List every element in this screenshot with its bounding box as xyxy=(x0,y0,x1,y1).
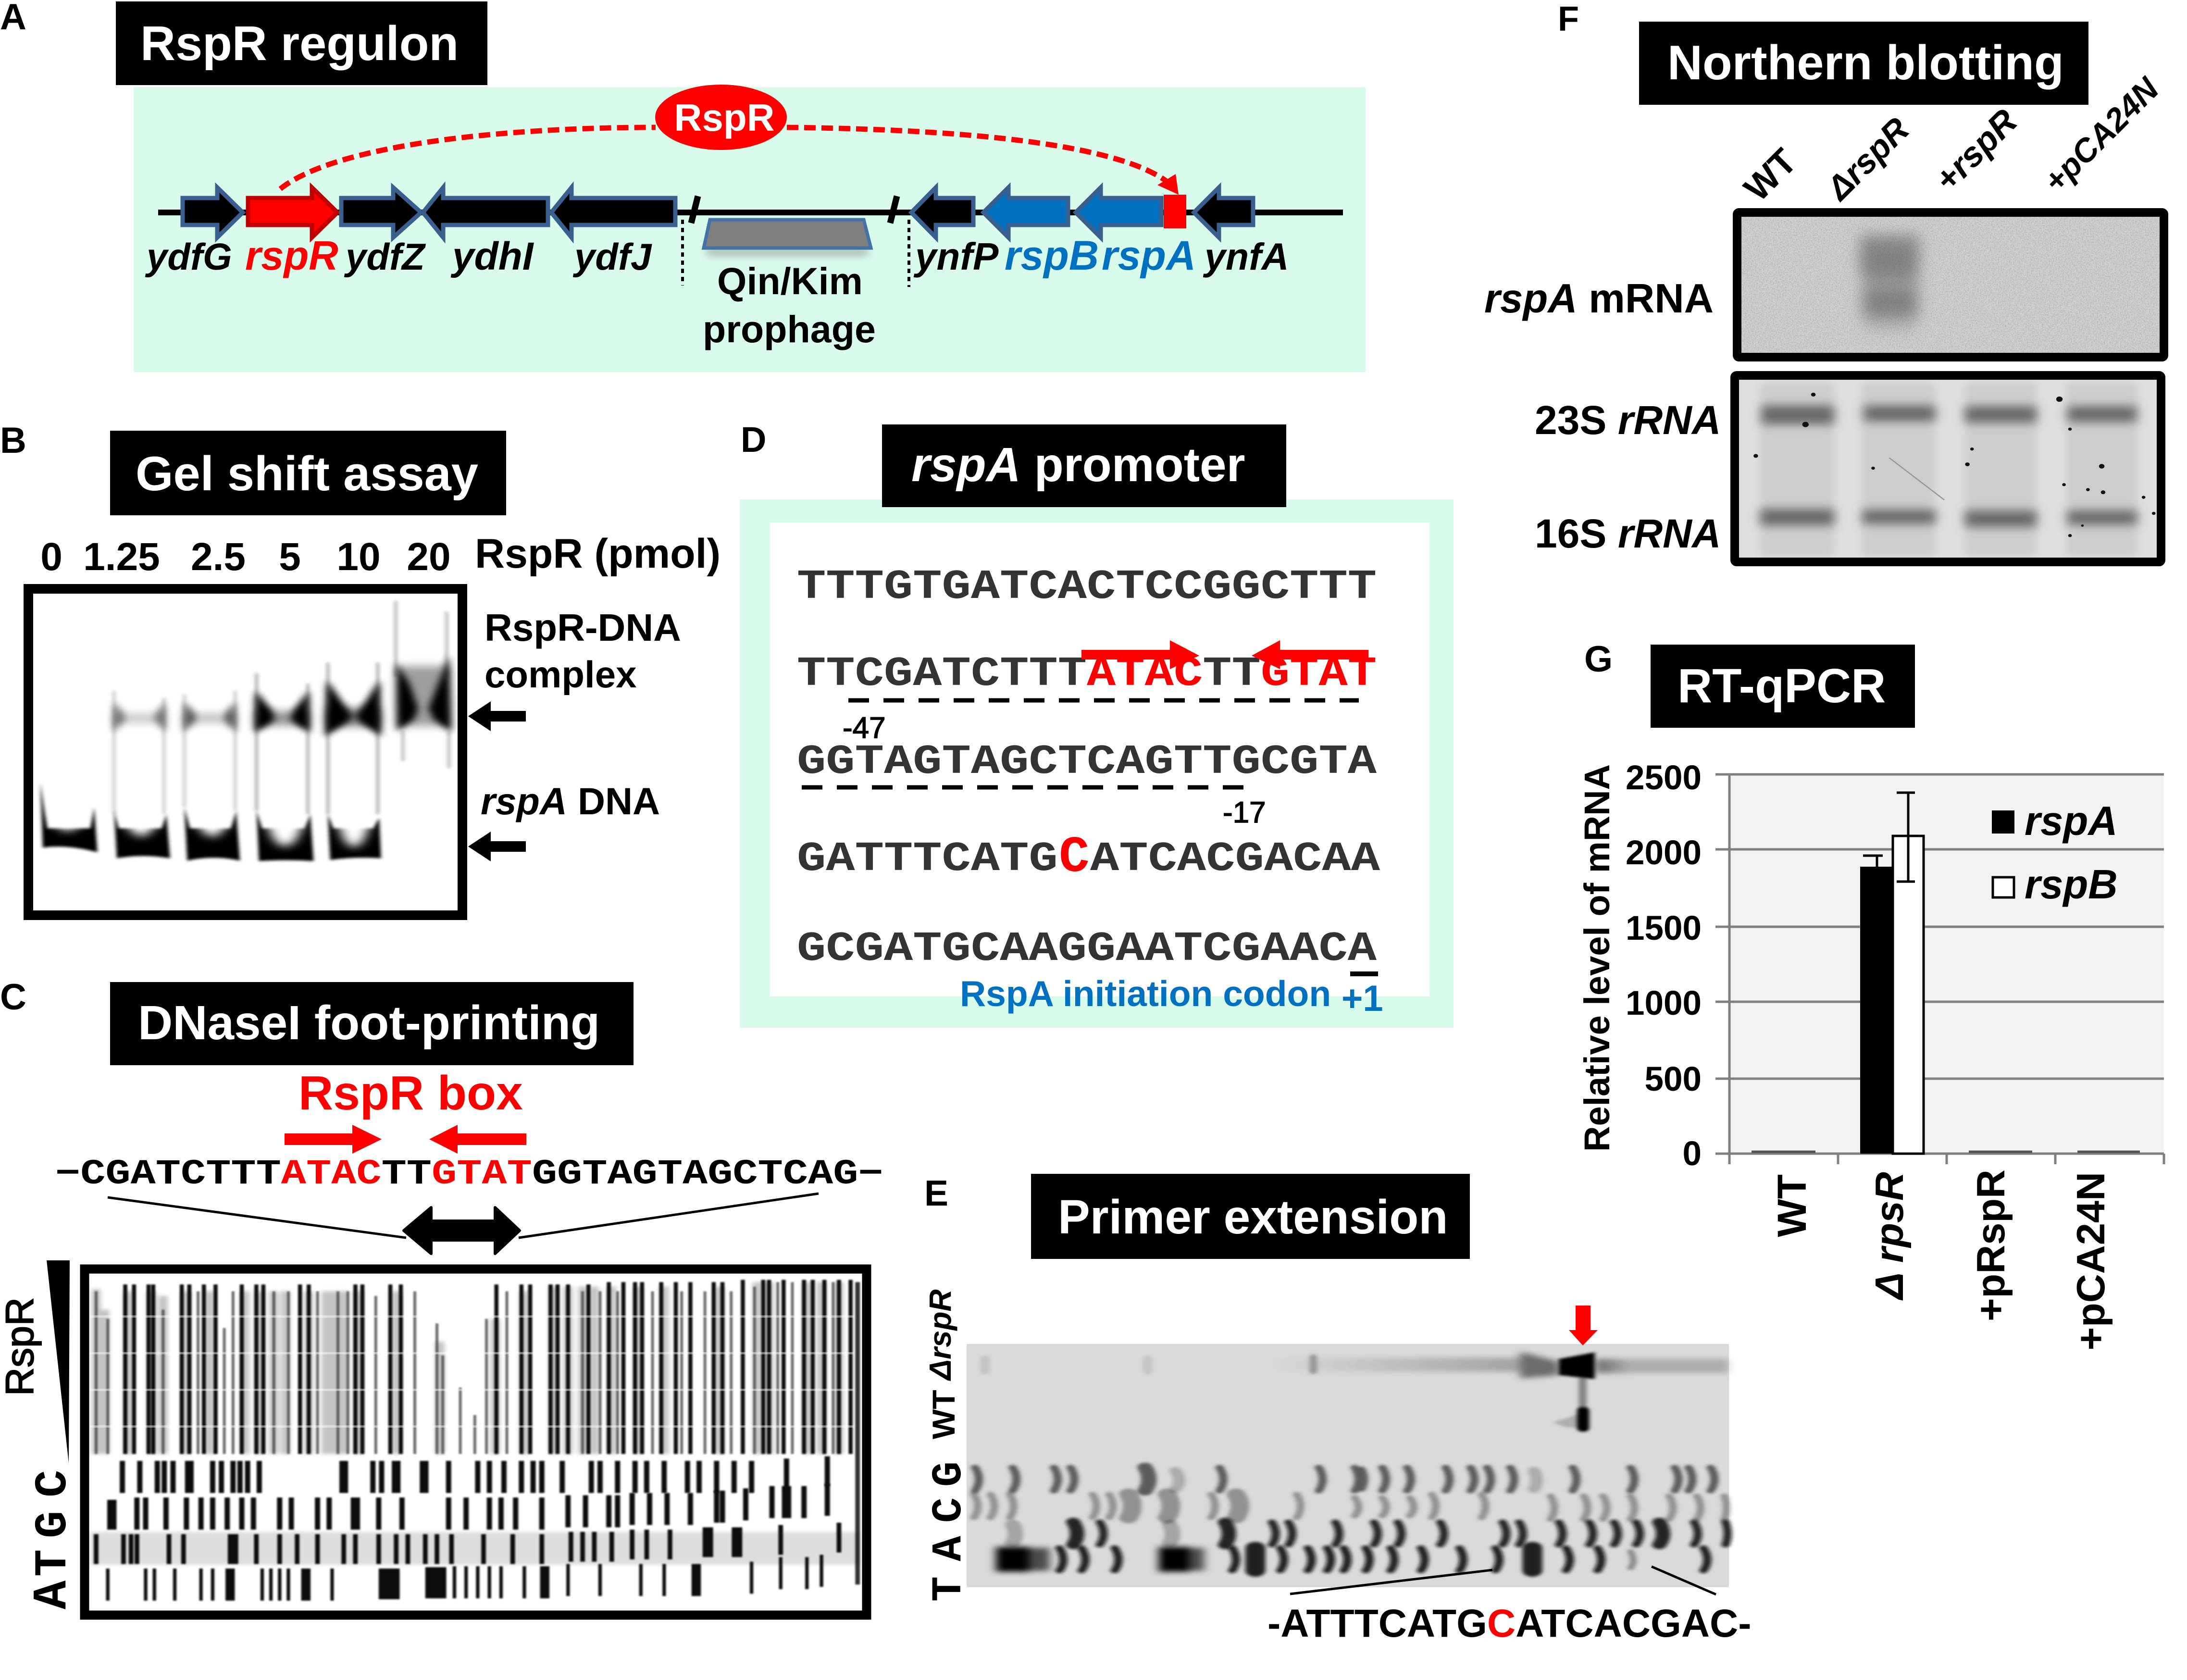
rRNA bands xyxy=(1760,405,2137,527)
heading: rspA promoter xyxy=(882,424,1286,507)
panel A: RspR regulon xyxy=(0,0,1366,372)
double-headed arrow xyxy=(404,1207,520,1254)
panel letter F: F xyxy=(1558,0,1579,38)
legend xyxy=(1992,798,2118,908)
promoter sequence: GATTTCATG xyxy=(797,836,1058,883)
heading: RT-qPCR: RT-qPCR xyxy=(1678,659,1886,713)
rspA DNA label: rspA DNA xyxy=(481,780,660,822)
RspR concentration labels: 10 xyxy=(336,535,381,579)
initiation codon underline xyxy=(1350,971,1378,976)
primer extension gel image xyxy=(967,1344,1729,1587)
gene labels: ydfJ xyxy=(572,236,652,278)
lane labels: C xyxy=(926,1497,973,1523)
mutant lane smear xyxy=(1272,1352,1729,1379)
near-zero bars xyxy=(1752,1151,2140,1153)
y axis values: 1000 xyxy=(1626,984,1702,1022)
sequencing lane letters: T xyxy=(27,1549,79,1577)
gel frame xyxy=(28,589,462,915)
gel image xyxy=(28,589,462,915)
panel letter B: B xyxy=(0,420,26,461)
RspA initiation codon label: RspA initiation codon xyxy=(960,973,1331,1014)
promoter sequence xyxy=(797,564,1380,973)
legend: rspA xyxy=(2025,798,2118,844)
x axis labels: WT xyxy=(1769,1174,1814,1237)
panel letter E: E xyxy=(924,1173,948,1213)
heading: DNaseI foot-printing: DNaseI foot-printing xyxy=(138,996,600,1050)
gene labels: rspA xyxy=(1102,233,1196,279)
RspR concentration labels: 2.5 xyxy=(191,535,246,579)
RspR-DNA complex label: complex xyxy=(485,653,636,696)
lower free DNA bands xyxy=(40,783,381,861)
prophage label xyxy=(703,260,876,350)
RspR concentration labels xyxy=(40,535,451,579)
delta rspR rspA bar xyxy=(1860,867,1893,1154)
gene labels: ynfA xyxy=(1203,235,1289,278)
panel G: RT-qPCR xyxy=(1577,639,2164,1350)
x axis labels xyxy=(1769,1170,2113,1350)
T lane bands xyxy=(1059,1548,1707,1571)
promoter sequence: TTTGTGATCACTCCGGCTTT xyxy=(797,564,1377,611)
16S rRNA label: 16S rRNA xyxy=(1535,511,1721,556)
reaction lanes dark bands xyxy=(125,1280,851,1454)
y axis values xyxy=(1626,759,1702,1173)
T lane large blobs xyxy=(996,1547,1204,1572)
panel letter G: G xyxy=(1584,639,1613,680)
arrow: complex band xyxy=(468,701,526,731)
red start-site arrow xyxy=(1569,1306,1598,1345)
rspA mRNA blot xyxy=(1737,212,2164,357)
RspR box red inverted-repeat arrows xyxy=(1081,640,1368,669)
RspR concentration labels: 1.25 xyxy=(83,535,160,579)
rspA band in delta rspR lane xyxy=(1860,236,1919,332)
gene labels: ydfZ xyxy=(344,236,426,278)
panel D: rspA promoter xyxy=(740,420,1454,1028)
x axis labels: Δ rpsR xyxy=(1867,1172,1912,1301)
gene labels: ydfG xyxy=(145,236,232,278)
lane labels: WT xyxy=(926,1390,961,1439)
red rspA promoter box xyxy=(1164,195,1186,228)
promoter sequence: GGTAGTAGCTCAGTTGCGTA xyxy=(797,739,1377,786)
promoter panel background xyxy=(740,499,1454,1028)
promoter sequence: ATCACGACAA xyxy=(1090,836,1380,883)
heading: Northern blotting: Northern blotting xyxy=(1667,36,2064,90)
vertical smear xyxy=(1579,1379,1586,1408)
upper complex band centres xyxy=(114,666,448,726)
prophage label: Qin/Kim xyxy=(717,260,863,302)
C sequencing lane xyxy=(123,1456,827,1493)
dashed protected region underlines xyxy=(802,700,1359,787)
footprinting gel image xyxy=(85,1269,867,1615)
23S rRNA label: 23S rRNA xyxy=(1535,398,1721,443)
heading: DNaseI foot-printing xyxy=(110,982,634,1065)
gene labels xyxy=(145,233,1289,279)
legend: rspB xyxy=(2025,862,2118,908)
heading: Primer extension xyxy=(1031,1174,1470,1259)
gene arrows xyxy=(183,187,1253,237)
promoter sequence: C xyxy=(1059,829,1090,886)
sequence lead lines xyxy=(1290,1567,1716,1594)
lane labels xyxy=(923,1289,973,1602)
position labels: -47 xyxy=(843,711,886,745)
sequencing lane letters: C xyxy=(27,1470,79,1497)
RspR protein ellipse: RspR xyxy=(674,96,774,139)
RspA initiation codon label: +1 xyxy=(1342,978,1383,1019)
heading: RT-qPCR xyxy=(1651,645,1915,728)
RspR pmol axis label: RspR (pmol) xyxy=(475,531,721,577)
y axis values: 500 xyxy=(1645,1060,1702,1098)
delta rspR rspB bar xyxy=(1893,836,1924,1154)
T lane background xyxy=(90,1532,859,1565)
transcription start band, mutant xyxy=(1559,1352,1595,1379)
sample labels: WT xyxy=(1736,140,1804,209)
Qin/Kim prophage block xyxy=(704,220,871,248)
rspB error bar xyxy=(1897,793,1915,882)
heading: RspR regulon xyxy=(116,1,487,85)
upper complex band edges xyxy=(113,656,451,736)
heading: Northern blotting xyxy=(1639,22,2088,105)
sample labels xyxy=(1736,70,2166,209)
genome line xyxy=(158,210,1343,215)
sequencing lane letters: G xyxy=(27,1511,79,1538)
G lane bands xyxy=(975,1468,1715,1491)
zoom lines xyxy=(108,1194,819,1238)
position labels xyxy=(843,711,1266,829)
y axis values: 2000 xyxy=(1626,834,1702,872)
gene labels: rspR xyxy=(245,233,338,279)
lane labels: T xyxy=(926,1576,973,1602)
rspA error bar xyxy=(1863,856,1883,867)
promoter sequence: GCGATGCAAGGAATCGAACA xyxy=(797,926,1377,973)
genome break marks xyxy=(691,196,897,223)
prophage label: prophage xyxy=(703,308,876,350)
panel E: primer extension xyxy=(923,1173,1752,1645)
prophage shadow xyxy=(707,248,868,256)
RspR concentration wedge xyxy=(47,1260,70,1463)
C lane bands xyxy=(974,1494,1727,1519)
lane shading xyxy=(1760,383,2137,556)
sample labels: ΔrspR xyxy=(1818,110,1916,208)
panel F: Northern blotting xyxy=(1484,0,2166,562)
y axis title: Relative level of mRNA xyxy=(1577,764,1617,1152)
panel letter C: C xyxy=(0,977,26,1018)
heading: Primer extension: Primer extension xyxy=(1058,1190,1448,1244)
panel B: gel shift assay xyxy=(0,420,721,915)
panel C: DNaseI foot-printing xyxy=(0,977,883,1615)
RspR concentration labels: 0 xyxy=(40,535,62,579)
lane labels: G xyxy=(926,1461,973,1487)
lane edge smears xyxy=(114,601,449,814)
lane separations xyxy=(90,1317,857,1427)
G sequencing lane xyxy=(112,1484,827,1530)
sequencing lane letters xyxy=(26,1470,80,1609)
y axis values: 2500 xyxy=(1626,759,1702,797)
promoter sequence: TTCGATCTTTATACTTGTAT xyxy=(797,651,1377,698)
promoter panel inner white xyxy=(770,523,1429,996)
RspR concentration labels: 20 xyxy=(407,535,451,579)
specks and scratch xyxy=(1753,393,2156,537)
T sequencing lane xyxy=(96,1523,839,1564)
lane labels: A xyxy=(926,1536,973,1561)
footprint sequence: −CGATCTTTATACTTGTATGGTAGTAGCTCAG− xyxy=(55,1155,883,1195)
rRNA loading control blot xyxy=(1735,375,2161,562)
footprinting gel frame xyxy=(85,1269,867,1615)
bar chart xyxy=(1715,774,2164,1164)
inner clearing above lower bands xyxy=(49,764,371,847)
faint top lane bands xyxy=(985,1356,1313,1372)
reaction lanes medium bands xyxy=(96,1282,833,1454)
A sequencing lane xyxy=(108,1555,821,1601)
arrow: free DNA band xyxy=(468,832,526,861)
start-site sequence: -ATTTCATGCATCACGAC- xyxy=(1267,1602,1752,1645)
RspR protein ellipse xyxy=(655,85,787,150)
y axis values: 0 xyxy=(1682,1135,1702,1173)
gene labels: ynfP xyxy=(913,235,999,278)
panel A background xyxy=(134,87,1366,372)
x axis labels: +pRspR xyxy=(1968,1170,2013,1321)
dotted prophage boundaries xyxy=(683,220,909,287)
y axis values: 1500 xyxy=(1626,909,1702,947)
RspR concentration labels: 5 xyxy=(279,535,301,579)
RspR box arrows xyxy=(285,1125,526,1154)
sample labels: +pCA24N xyxy=(2037,70,2166,200)
rspA mRNA label: rspA mRNA xyxy=(1484,276,1714,322)
x axis labels: +pCA24N xyxy=(2068,1172,2113,1350)
heading: rspA promoter: rspA promoter xyxy=(911,438,1245,492)
RspR-DNA complex label: RspR-DNA xyxy=(485,606,681,649)
heading: Gel shift assay: Gel shift assay xyxy=(136,447,478,501)
gene labels: ydhI xyxy=(450,235,534,278)
lane labels: ΔrspR xyxy=(923,1289,957,1381)
position labels: -17 xyxy=(1223,796,1266,829)
RspR-DNA complex label xyxy=(485,606,681,696)
right gel edge xyxy=(856,1282,859,1584)
A lane bands xyxy=(1013,1522,1727,1545)
arrowhead into rspA promoter xyxy=(1157,174,1179,195)
dashed regulation arcs xyxy=(280,127,1167,189)
sequencing lane letters: A xyxy=(26,1580,80,1609)
sample labels: +rspR xyxy=(1927,102,2025,199)
heading: Gel shift assay xyxy=(110,431,506,515)
gene labels: rspB xyxy=(1005,233,1099,279)
panel letter D: D xyxy=(741,420,766,460)
RspR box label: RspR box xyxy=(298,1066,523,1120)
transcription start band, WT xyxy=(1553,1411,1583,1428)
reaction lanes soft background xyxy=(96,1282,839,1454)
heading: RspR regulon: RspR regulon xyxy=(140,17,459,71)
